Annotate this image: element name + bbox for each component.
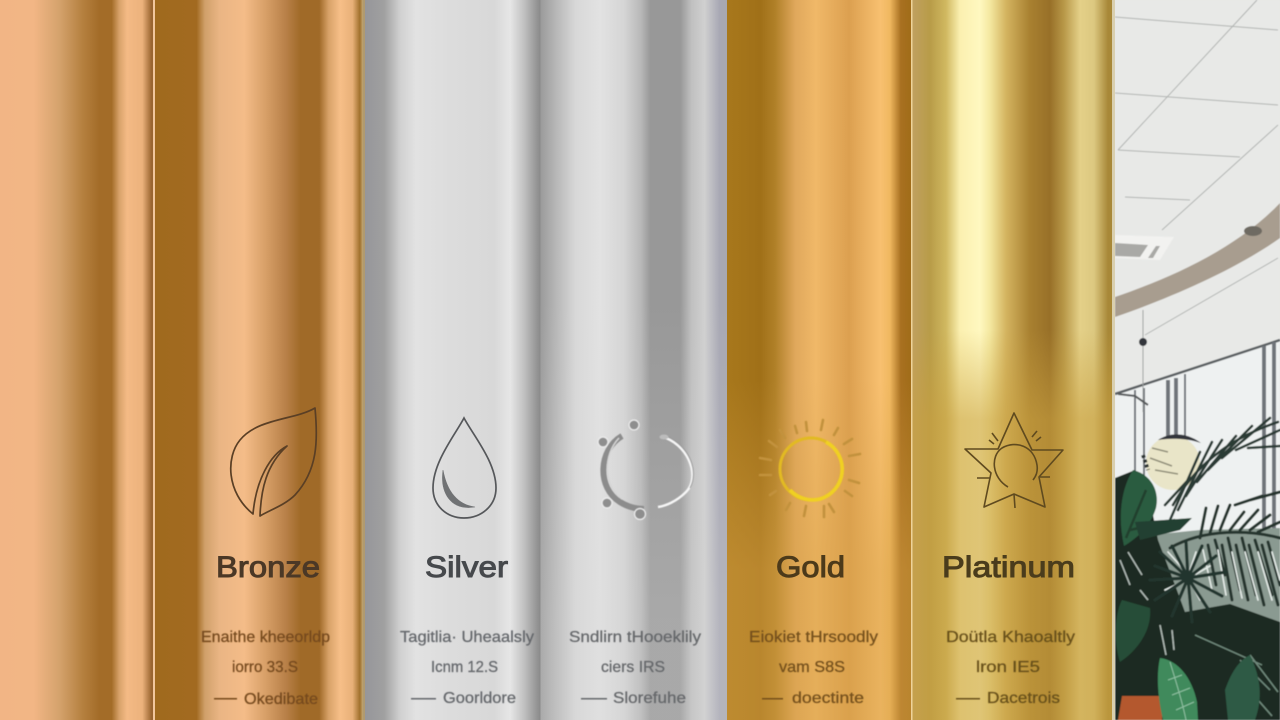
icon: star with circle [965, 413, 1063, 508]
heading: Bronze: Bronze [216, 551, 320, 584]
text: gold details: vam S8S [779, 659, 845, 676]
text: silver details: Goorldore [443, 690, 516, 707]
mid-tone foliage behind the fronds [1150, 528, 1280, 625]
text: platinum details: Dacetrois [987, 690, 1060, 707]
panel: platinum column [911, 0, 1112, 720]
heading: Silver: Silver [425, 551, 508, 584]
icon: embossed ring with dots [598, 420, 693, 520]
icon: water drop [433, 418, 496, 518]
heading: Gold: Gold [776, 551, 845, 584]
text: silver details: Tagitlia· Uheaalsly [400, 629, 534, 646]
plant [1115, 418, 1280, 720]
icon: sun [760, 420, 860, 517]
text: bronze details: Okedibate [244, 691, 318, 708]
text: second silver details: ciers IRS [601, 659, 665, 676]
dark green leaf, lower left [1116, 600, 1150, 662]
large dark green leaf, upper left [1121, 470, 1157, 546]
text: platinum details: lron IE5 [976, 659, 1040, 676]
text: bronze details: Enaithe kheeorldp [201, 629, 330, 646]
text: second silver details [569, 629, 701, 707]
white highlights in foliage [1120, 552, 1278, 716]
icon: leaf [231, 408, 316, 516]
text: platinum details [946, 629, 1075, 707]
mid palm frond [1170, 492, 1280, 605]
panel: bronze column [153, 0, 363, 720]
ceiling grid [1115, 0, 1278, 335]
panel: silver column [363, 0, 540, 720]
pendant lamp [1143, 434, 1201, 490]
text: gold details: doectinte [792, 690, 864, 707]
light streaks between fronds [1165, 550, 1280, 600]
central starburst frond [1150, 542, 1226, 622]
photo: office interior background [1112, 0, 1280, 720]
text: silver details: Icnm 12.S [431, 659, 498, 676]
text: gold details: Eiokiet tHrsoodly [749, 629, 878, 646]
panel: gold column [727, 0, 912, 720]
text: silver details [400, 629, 534, 707]
text: second silver details: Slorefuhe [613, 690, 686, 707]
panel: far-left copper column [0, 0, 153, 720]
curved ceiling beam [1115, 203, 1280, 317]
text: bronze details: iorro 33.S [232, 659, 298, 676]
top palm frond [1165, 418, 1280, 520]
air conditioning vent [1115, 235, 1174, 260]
text: gold details [749, 629, 878, 707]
heading: Platinum: Platinum [942, 551, 1075, 584]
text: second silver details: Sndlirn tHooeklily [569, 629, 701, 646]
window wall [1115, 310, 1280, 720]
panel: second silver column [539, 0, 727, 720]
dark foliage mass [1115, 470, 1280, 720]
terracotta pot [1118, 696, 1162, 720]
text: platinum details: Doütla Khaoaltly [946, 629, 1075, 646]
large green leaf, bottom [1158, 658, 1198, 720]
text: bronze details [201, 629, 330, 708]
